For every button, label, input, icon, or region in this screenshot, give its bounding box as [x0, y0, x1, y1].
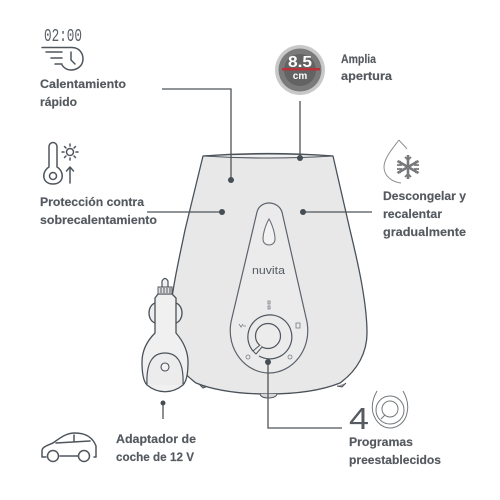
text: calentamiento [40, 77, 126, 109]
text: descongelar: gradualmente [383, 225, 466, 239]
adapter front [147, 353, 183, 385]
icon: thermometer and sun [44, 142, 78, 184]
brand name: nuvita [252, 265, 286, 277]
text: calentamiento: rápido [40, 95, 77, 109]
dial [248, 315, 292, 359]
text: proteccion: Protección contra [40, 195, 144, 209]
text: amplia apertura [341, 52, 392, 83]
text: amplia apertura: Amplia [341, 52, 376, 66]
text: descongelar: recalentar [383, 207, 442, 221]
rim [203, 154, 333, 158]
icon: lens 8.5 cm: cm [293, 71, 307, 82]
program icons [239, 301, 300, 359]
text: amplia apertura: apertura [341, 69, 392, 83]
warmer feet [199, 383, 346, 388]
icon: four programs dial [349, 391, 408, 436]
warmer body [169, 154, 367, 394]
indicator drop [263, 219, 275, 245]
leader: proteccion [147, 209, 225, 215]
leader: programas [265, 359, 342, 428]
adapter thread [158, 287, 172, 294]
text: calentamiento: Calentamiento [40, 77, 126, 91]
icon: four programs dial: 4 [349, 401, 369, 436]
car adapter [142, 278, 188, 392]
text: descongelar [383, 189, 466, 239]
adapter side clips [149, 303, 182, 323]
text: programas: Programas [349, 435, 413, 449]
leader: adaptador [160, 400, 166, 419]
icon: fast heating clock [42, 27, 83, 70]
control panel [230, 203, 308, 373]
leader: descongelar [300, 209, 372, 215]
text: programas [349, 435, 441, 467]
icon: drop and snowflake [384, 140, 419, 183]
adapter button [161, 363, 169, 371]
icon: fast heating clock: 02:00 [44, 27, 82, 47]
text: proteccion [40, 195, 157, 227]
icon: car [42, 433, 96, 462]
text: descongelar: Descongelar y [383, 189, 466, 203]
leader: calentamiento [162, 89, 234, 183]
icon: lens 8.5 cm: 8.5 [288, 54, 312, 71]
foot [260, 394, 277, 398]
icon: lens 8.5 cm [275, 45, 325, 95]
adapter tip [162, 278, 168, 287]
text: programas: preestablecidos [349, 453, 441, 467]
leader: apertura [297, 101, 303, 161]
product: bottle warmer [169, 154, 367, 398]
text: adaptador: Adaptador de [116, 432, 196, 446]
text: adaptador: coche de 12 V [116, 450, 194, 464]
text: proteccion: sobrecalentamiento [40, 213, 157, 227]
text: adaptador [116, 432, 196, 464]
adapter body [142, 294, 188, 392]
